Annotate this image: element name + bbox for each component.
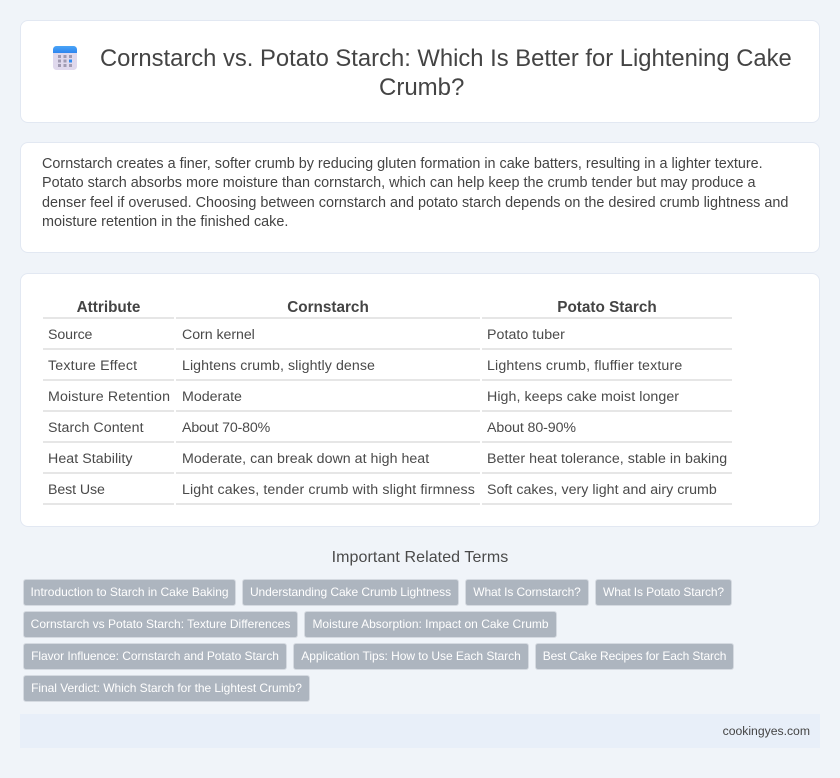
summary paragraph: moisture retention in the finished cake. <box>42 214 288 230</box>
related terms tags: Understanding Cake Crumb Lightness <box>250 585 451 599</box>
title <box>100 45 792 101</box>
related terms tags: Cornstarch vs Potato Starch: Texture Differences <box>31 617 290 631</box>
row: source: Source <box>48 327 92 343</box>
row: starch content: About 80-90% <box>487 420 576 436</box>
header row: Cornstarch <box>287 299 369 316</box>
header row: Attribute <box>77 299 140 316</box>
row: starch content <box>48 420 576 436</box>
row: texture effect: Lightens crumb, fluffier texture <box>487 358 682 374</box>
row: source <box>48 327 565 343</box>
row: moisture retention <box>48 389 679 405</box>
related terms tags: Best Cake Recipes for Each Starch <box>543 649 726 663</box>
summary paragraph: Potato starch absorbs more moisture than cornstarch, which can help keep the crumb tender but may produce a <box>42 175 756 191</box>
row: moisture retention: Moderate <box>182 389 242 405</box>
comparison table <box>43 299 732 505</box>
row: texture effect <box>48 358 682 374</box>
row: starch content: About 70-80% <box>182 420 270 436</box>
row: source: Corn kernel <box>182 327 255 343</box>
row: best use <box>48 482 717 498</box>
header row: Potato Starch <box>557 299 657 316</box>
summary paragraph: Cornstarch creates a finer, softer crumb by reducing gluten formation in cake batters, resulting in a lighter texture. <box>42 156 763 172</box>
row: moisture retention: High, keeps cake moist longer <box>487 389 679 405</box>
row: source: Potato tuber <box>487 327 565 343</box>
related terms tags: Application Tips: How to Use Each Starch <box>301 649 521 663</box>
row: texture effect: Lightens crumb, slightly dense <box>182 358 375 374</box>
footer source text: cookingyes.com <box>723 724 810 738</box>
row: best use: Best Use <box>48 482 105 498</box>
icon: calendar grid <box>53 46 77 70</box>
related terms tags: Flavor Influence: Cornstarch and Potato Starch <box>31 649 279 663</box>
related terms tags: Moisture Absorption: Impact on Cake Crumb <box>312 617 549 631</box>
related terms tags: Introduction to Starch in Cake Baking <box>30 585 229 599</box>
row: heat stability: Better heat tolerance, stable in baking <box>487 451 727 467</box>
related terms tags: Final Verdict: Which Starch for the Lightest Crumb? <box>31 681 302 695</box>
title: Crumb? <box>379 74 464 101</box>
summary paragraph <box>42 156 788 230</box>
panel: comparison table <box>20 273 820 527</box>
related terms tags: What Is Potato Starch? <box>603 585 724 599</box>
row: heat stability <box>48 451 727 467</box>
row: heat stability: Heat Stability <box>48 451 133 467</box>
panel: summary text <box>20 142 820 253</box>
related terms tags <box>23 579 734 702</box>
summary paragraph: denser feel if overused. Choosing between cornstarch and potato starch depends on the desired crumb lightness and <box>42 195 788 211</box>
row: starch content: Starch Content <box>48 420 144 436</box>
row: texture effect: Texture Effect <box>48 358 137 374</box>
related terms tags: What Is Cornstarch? <box>473 585 581 599</box>
panel: title header <box>20 20 820 123</box>
header row <box>77 299 657 316</box>
title: Cornstarch vs. Potato Starch: Which Is Better for Lightening Cake <box>100 45 792 72</box>
row: moisture retention: Moisture Retention <box>48 389 170 405</box>
footer bar <box>20 714 820 748</box>
row: best use: Soft cakes, very light and airy crumb <box>487 482 717 498</box>
row: best use: Light cakes, tender crumb with slight firmness <box>182 482 475 498</box>
row: heat stability: Moderate, can break down at high heat <box>182 451 429 467</box>
heading: important related terms: Important Related Terms <box>332 549 508 566</box>
